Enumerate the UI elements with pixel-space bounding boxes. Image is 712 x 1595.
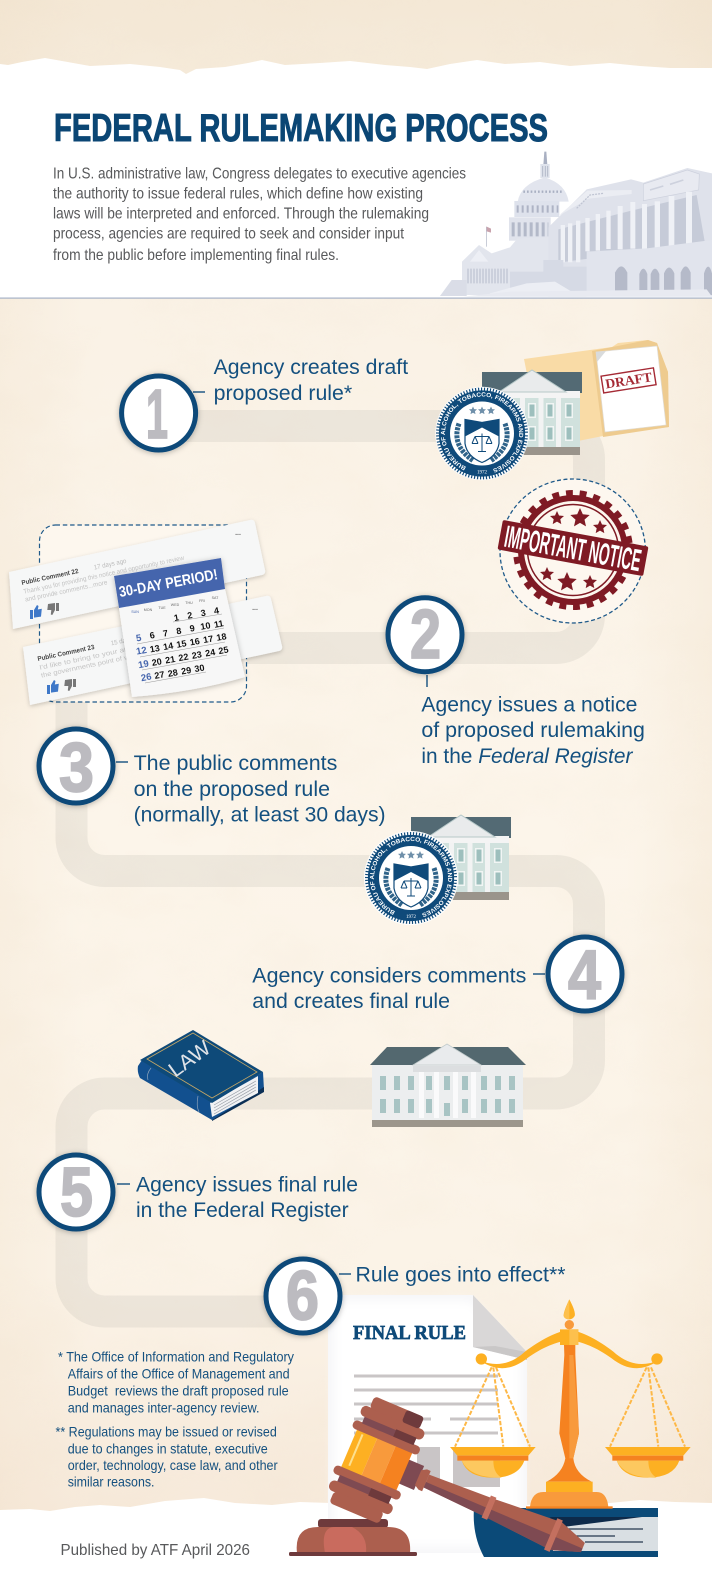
- step 5 text: Agency issues final rule: [136, 1173, 358, 1197]
- calendar dates: 5: [135, 633, 143, 644]
- calendar dates: 25: [218, 645, 229, 656]
- footnotes: ** Regulations may be issued or revised: [56, 1424, 277, 1440]
- publication line: Published by ATF April 2026: [60, 1542, 250, 1559]
- icon: gavel: [289, 1393, 606, 1595]
- calendar dates: 15: [176, 638, 187, 650]
- calendar dates: 1: [173, 612, 180, 623]
- calendar header: 30-DAY PERIOD!: [118, 566, 219, 601]
- calendar dates: 6: [149, 630, 156, 641]
- comment card 23: ...: [252, 605, 258, 612]
- step 5 text: in the Federal Register: [136, 1198, 349, 1222]
- footnotes: [56, 1349, 294, 1490]
- badge: [388, 598, 462, 672]
- badge: [122, 376, 196, 450]
- icon: agency building behind seal: [482, 370, 582, 455]
- calendar dates: 3: [200, 608, 207, 618]
- step 4 text: [252, 964, 526, 1013]
- badge: [266, 1259, 340, 1333]
- post: [547, 1345, 592, 1482]
- badge: [39, 1155, 113, 1229]
- calendar dates: 24: [204, 647, 216, 659]
- dashed comments frame: [40, 525, 246, 702]
- step 5 marker: [39, 1153, 130, 1231]
- calendar dates: 14: [162, 641, 174, 652]
- intro paragraph: In U.S. administrative law, Congress delegates to executive agencies: [53, 165, 466, 182]
- calendar: [114, 558, 245, 697]
- calendar dates: 17: [202, 634, 214, 645]
- footnotes: order, technology, case law, and other: [68, 1457, 278, 1473]
- connector: [193, 391, 205, 393]
- footnotes: and manages inter-agency review.: [68, 1399, 260, 1415]
- left pan: [450, 1447, 536, 1456]
- calendar day names: FRI: [199, 599, 205, 603]
- footnotes: due to changes in statute, executive: [68, 1440, 268, 1456]
- step 2 text: Agency issues a notice: [421, 693, 637, 717]
- calendar day names: SAT: [212, 596, 219, 600]
- icon: ATF seal second: BUREAU OF ALCOHOL, TOBACCO, FIREARMS AND EXPLOSIVES: [370, 836, 452, 917]
- icon: agency building behind second seal: [411, 815, 511, 900]
- icon: ATF seal: 1972: [477, 470, 488, 476]
- number: 4: [568, 936, 601, 1014]
- notice banner: [497, 518, 649, 579]
- calendar dates: 27: [154, 669, 165, 681]
- icon: ATF seal second: 1972: [406, 915, 416, 920]
- calendar dates: 4: [213, 605, 220, 616]
- calendar day names: [131, 596, 219, 614]
- step 1 text: [214, 355, 408, 405]
- illustration: US Capitol: [440, 152, 712, 297]
- step 6 marker: [266, 1256, 351, 1334]
- comment card 23: I'd like to bring to your attention a: [39, 640, 158, 672]
- number: 2: [410, 595, 441, 673]
- connector: [426, 675, 428, 687]
- calendar dates: 7: [162, 628, 169, 639]
- connector: [117, 1183, 130, 1185]
- number: 5: [60, 1153, 93, 1231]
- icon: scales of justice: [450, 1299, 691, 1509]
- comment card 22: ...: [235, 530, 241, 537]
- footnotes: Budget reviews the draft proposed rule: [68, 1382, 289, 1398]
- calendar dates: 30: [194, 663, 205, 674]
- number: 6: [286, 1256, 319, 1334]
- intro paragraph: process, agencies are required to seek and consider input: [53, 226, 404, 243]
- comment card 23: Public Comment 23: [37, 644, 95, 663]
- title: FEDERAL RULEMAKING PROCESS: [54, 107, 548, 150]
- calendar dates: 13: [149, 643, 161, 655]
- icon: federal building: [370, 1044, 526, 1127]
- calendar dates: 9: [189, 623, 196, 634]
- step 3 text: (normally, at least 30 days): [134, 803, 386, 827]
- footnotes: similar reasons.: [68, 1474, 154, 1490]
- intro paragraph: the authority to issue federal rules, which define how existing: [53, 185, 423, 202]
- calendar dates: 23: [191, 649, 203, 661]
- comment card 23: the governments point of view on: [40, 650, 150, 680]
- beam: [480, 1329, 658, 1368]
- calendar dates: 16: [189, 636, 201, 648]
- comment card 22: 17 days ago: [93, 558, 127, 572]
- process path: [72, 426, 589, 1312]
- stars: [540, 508, 607, 590]
- thumb up icon: [30, 605, 42, 619]
- icon: important notice stamp: [497, 479, 649, 623]
- comment card 22: Thank you for providing this notice and opportunity to review: [23, 555, 185, 596]
- calendar dates: 12: [135, 645, 148, 658]
- icon: final rule document: [328, 1295, 527, 1553]
- step 5 text: [136, 1173, 358, 1222]
- step 1 text: Agency creates draft: [214, 355, 408, 379]
- calendar dates: 28: [167, 667, 179, 679]
- intro paragraph: [53, 165, 466, 264]
- calendar dates: 20: [151, 656, 163, 668]
- connector: [533, 973, 545, 975]
- step 1 marker: [122, 375, 205, 453]
- step 4 text: Agency considers comments: [252, 964, 526, 988]
- icon: ATF seal: BUREAU OF ALCOHOL, TOBACCO, FIREARMS AND EXPLOSIVES: [440, 392, 524, 472]
- comment card 23: 15 days ago: [110, 634, 144, 647]
- number: 3: [59, 728, 94, 806]
- thumb down icon: [47, 603, 59, 615]
- gavel mallet: [321, 1393, 606, 1595]
- step 4 marker: [533, 936, 622, 1014]
- step 3 text: The public comments: [134, 751, 337, 775]
- calendar dates: 8: [175, 626, 182, 636]
- calendar dates: 18: [216, 631, 227, 643]
- icon: books under scales: [474, 1508, 658, 1557]
- step 1 text: proposed rule*: [214, 381, 353, 405]
- thumb down icon: [64, 679, 76, 691]
- icon: law book: [138, 1030, 264, 1121]
- badge: [39, 729, 113, 803]
- calendar day names: WED: [171, 603, 180, 607]
- number: 1: [146, 375, 168, 453]
- intro paragraph: laws will be interpreted and enforced. Through the rulemaking: [53, 205, 429, 222]
- step 2 marker: [388, 595, 462, 687]
- calendar dates: [135, 605, 229, 684]
- step 2 text: of proposed rulemaking: [421, 718, 645, 742]
- comment card 22: and provide comments...more: [24, 579, 108, 604]
- draft stamp: DRAFT: [604, 369, 653, 391]
- step 2 text: in the Federal Register: [421, 744, 633, 768]
- icon: draft folder: [524, 340, 669, 441]
- calendar day names: TUE: [158, 606, 166, 610]
- step 2 text: [421, 693, 645, 768]
- thumb up icon: [47, 680, 59, 694]
- footnotes: * The Office of Information and Regulatory: [58, 1349, 294, 1365]
- right pan: [605, 1447, 691, 1456]
- heading final rule: FINAL RULE: [353, 1322, 466, 1344]
- comment card 23: [23, 596, 282, 705]
- intro paragraph: from the public before implementing final rules.: [53, 247, 339, 264]
- step 4 text: and creates final rule: [252, 989, 450, 1013]
- calendar dates: 21: [164, 654, 176, 666]
- calendar day names: THU: [185, 601, 193, 605]
- calendar dates: 10: [200, 620, 211, 632]
- connector: [116, 761, 128, 763]
- step 3 text: [134, 751, 386, 827]
- comment card 22: [9, 520, 265, 629]
- badge: [548, 937, 622, 1011]
- left chains: [455, 1367, 530, 1447]
- calendar dates: 22: [178, 652, 189, 663]
- calendar day names: SUN: [131, 610, 139, 614]
- step 3 text: on the proposed rule: [134, 777, 330, 801]
- step 3 marker: [39, 728, 128, 806]
- calendar day names: MON: [144, 608, 153, 612]
- gavel base: [289, 1519, 417, 1556]
- calendar dates: 19: [137, 659, 150, 671]
- icon: law book: LAW: [164, 1036, 215, 1082]
- calendar dates: 26: [140, 672, 152, 684]
- right chains: [610, 1367, 685, 1447]
- connector: [339, 1273, 351, 1275]
- calendar dates: 29: [180, 665, 192, 677]
- calendar dates: 11: [213, 618, 224, 630]
- calendar dates: 2: [186, 610, 193, 621]
- footer white panel with torn edge: [0, 1498, 712, 1595]
- comment card 22: Public Comment 22: [21, 568, 79, 587]
- header divider: [0, 298, 712, 299]
- footnotes: Affairs of the Office of Management and: [68, 1366, 290, 1382]
- header white panel with torn edge: [0, 58, 712, 298]
- step 6 text: Rule goes into effect**: [356, 1263, 566, 1287]
